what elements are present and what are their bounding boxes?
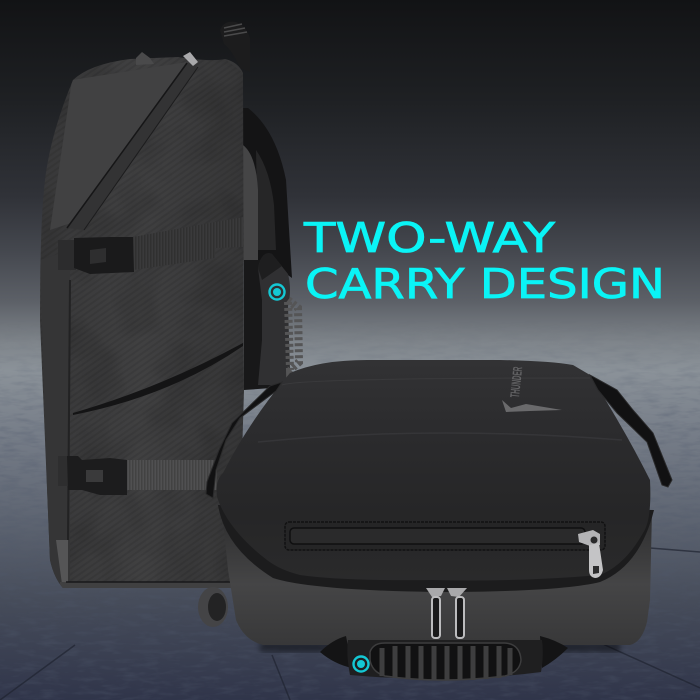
- base lip: [60, 582, 240, 588]
- title: CARRY DESIGN: [305, 260, 665, 308]
- diagonal zipper band: [67, 63, 198, 230]
- right strap and clips: [590, 375, 672, 487]
- main top face: [217, 360, 650, 580]
- main zipper puller: [578, 530, 603, 578]
- top tab: [136, 52, 154, 65]
- top handle: [220, 22, 250, 72]
- piping around top face: [218, 505, 654, 592]
- side carry handle with grip: [258, 253, 299, 385]
- title: [303, 214, 665, 308]
- darker side gusset: [46, 478, 60, 584]
- title: TWO-WAY: [303, 214, 556, 262]
- rear lower strap behind handle: [244, 260, 272, 390]
- main side body: [40, 57, 244, 588]
- slip pocket zipper: [285, 522, 605, 550]
- back mesh strip: [243, 145, 258, 262]
- marker: bottom handle: [354, 656, 368, 672]
- lower pocket seam: [73, 343, 243, 415]
- left strap and clips: [206, 382, 282, 498]
- marker: side handle: [270, 284, 284, 300]
- pale base corner: [56, 540, 68, 584]
- back padding frame: [243, 108, 292, 278]
- lower mesh band: [222, 510, 652, 645]
- wheel at base: [198, 587, 228, 627]
- lower strap and buckle: [58, 456, 217, 495]
- brand logo on the top face: THUNDER: [507, 366, 525, 398]
- zipper pull on top: [183, 52, 198, 66]
- upper strap and buckle: [58, 217, 243, 274]
- bottom carry handle with grip: [320, 636, 568, 680]
- backpack standing, side view: [40, 22, 292, 627]
- twin zipper pulls: [426, 588, 467, 638]
- brand logo on the top face: [502, 366, 562, 412]
- backpack lying flat: [206, 360, 672, 652]
- soft contact shadow: [260, 642, 620, 652]
